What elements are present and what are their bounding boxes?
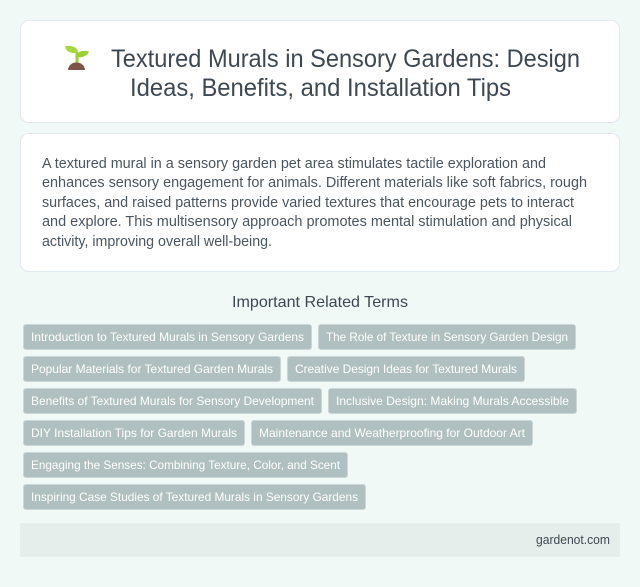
tag: The Role of Texture in Sensory Garden Design: [326, 330, 568, 344]
tag: [24, 420, 244, 446]
tag: Creative Design Ideas for Textured Murals: [295, 362, 517, 376]
tag: Benefits of Textured Murals for Sensory Development: [31, 394, 315, 408]
tag: [24, 388, 322, 414]
tag: [288, 356, 524, 382]
tag: Popular Materials for Textured Garden Murals: [31, 362, 273, 376]
heading: related terms: Important Related Terms: [232, 294, 408, 311]
tag: [24, 452, 348, 478]
text block: description: and explore. This multisensory approach promotes mental stimulation and physical: [42, 214, 572, 230]
text block: description: A textured mural in a sensory garden pet area stimulates tactile exploration and: [42, 156, 546, 172]
tag: [24, 484, 366, 510]
tag: Inclusive Design: Making Murals Accessible: [336, 394, 569, 408]
panel: title card: [20, 20, 620, 122]
tag: Introduction to Textured Murals in Sensory Gardens: [31, 330, 304, 344]
tag: Inspiring Case Studies of Textured Murals in Sensory Gardens: [31, 490, 358, 504]
tag: [318, 324, 576, 350]
tags: related terms: [24, 324, 576, 510]
text block: description: surfaces, and raised patterns provide varied textures that encourage pets to interact: [42, 195, 574, 211]
tag: DIY Installation Tips for Garden Murals: [31, 426, 237, 440]
icon: seedling: [65, 46, 89, 70]
title: [111, 45, 580, 102]
tag: [24, 324, 312, 350]
text block: description: enhances sensory engagement for animals. Different materials like soft fabrics, rough: [42, 175, 587, 191]
title: Textured Murals in Sensory Gardens: Design: [111, 45, 580, 73]
text block: description: activity, improving overall well-being.: [42, 234, 272, 250]
footer: gardenot.com: [536, 533, 610, 547]
footer: [20, 523, 620, 557]
text block: description: [42, 156, 587, 250]
tag: Engaging the Senses: Combining Texture, Color, and Scent: [31, 458, 341, 472]
tag: [328, 388, 576, 414]
tag: [252, 420, 532, 446]
title: Ideas, Benefits, and Installation Tips: [130, 74, 511, 102]
panel: description: [20, 134, 620, 272]
tag: [24, 356, 280, 382]
tag: Maintenance and Weatherproofing for Outdoor Art: [259, 426, 526, 440]
